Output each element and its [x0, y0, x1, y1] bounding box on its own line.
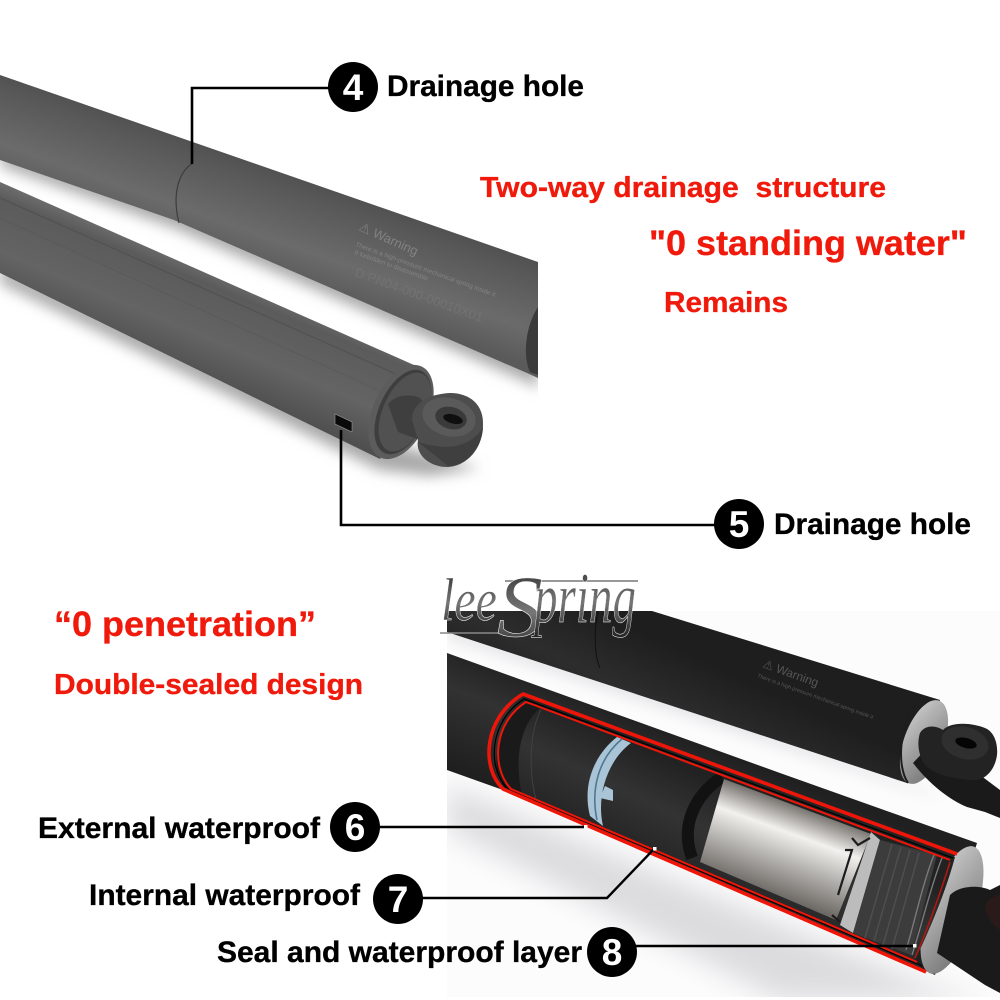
product photo: black cutaway actuator: [447, 611, 1000, 1000]
callout 8: seal and waterproof layer: Seal and waterproof layer: [217, 936, 582, 969]
upper rod shadow: [0, 150, 538, 388]
rod shadows: [447, 634, 952, 997]
watermark logo: leeSpring: pring: [531, 558, 636, 638]
product photo: grey actuator rods: [0, 75, 538, 476]
rear rod warning label: There is a high pressure mechanical spring inside it: [756, 673, 874, 721]
red seal outline: [489, 694, 957, 972]
callout 8: seal and waterproof layer: 8: [602, 932, 622, 973]
callout 4: drainage hole: 4: [343, 67, 364, 108]
upper grey rod: [0, 75, 538, 378]
callout 7: internal waterproof: Internal waterproof: [89, 879, 361, 912]
heading: two-way drainage: "0 standing water": [649, 224, 967, 263]
lower rod shadow: [0, 265, 480, 476]
callout 6: external waterproof: [38, 802, 588, 852]
callout 7: internal waterproof: [89, 847, 656, 924]
watermark logo: leeSpring: lee: [441, 567, 497, 633]
front rod connector: [937, 885, 1000, 993]
silver motor body: [700, 779, 871, 920]
heading: two-way drainage: Two-way drainage structure: [480, 172, 886, 204]
front black rod: [447, 653, 997, 981]
photo backdrop: [447, 611, 1000, 999]
warning label on upper rod: [353, 219, 496, 325]
callout 8: seal and waterproof layer: [217, 927, 916, 977]
callout 7: internal waterproof: 7: [388, 879, 408, 920]
warning label on upper rod: ⚠ Warning: [357, 219, 421, 258]
callout 5: drainage hole: [341, 430, 971, 549]
watermark logo: leeSpring: S: [497, 559, 543, 656]
callout 5: drainage hole: Drainage hole: [774, 508, 971, 541]
callout 6: external waterproof: External waterproof: [38, 812, 321, 845]
cutaway interior: [489, 694, 957, 972]
callout 4: drainage hole: Drainage hole: [387, 70, 584, 103]
lower grey rod: [0, 182, 447, 469]
threaded seal section: [853, 840, 937, 955]
heading: double-sealed: “0 penetration”: [54, 605, 316, 644]
callout 6: external waterproof: 6: [345, 807, 365, 848]
rear black rod: [447, 611, 958, 790]
warning label on upper rod: There is a high-pressure mechanical spring inside it: [354, 241, 496, 299]
heading: double-sealed: Double-sealed design: [54, 669, 363, 701]
black collar: [688, 777, 722, 858]
warning label on upper rod: D PN04-000-00010X01: [353, 265, 485, 325]
heading: double-sealed: [54, 605, 363, 701]
heading: two-way drainage: Remains: [664, 287, 788, 319]
rear rod connector: [913, 721, 1000, 818]
silver end tabs: [832, 832, 880, 933]
blue ring: [588, 737, 631, 826]
warning label on upper rod: It forbidden to disassemble: [353, 249, 429, 283]
callout 5: drainage hole: 5: [729, 504, 749, 545]
watermark logo: leeSpring: [440, 558, 638, 656]
callout 4: drainage hole: [192, 62, 584, 164]
heading: two-way drainage: [480, 172, 967, 319]
rear rod warning label: ⚠ Warning: [761, 657, 821, 690]
drainage hole opening: [335, 414, 352, 432]
rod eye connector: [388, 392, 483, 467]
rod end cap: [370, 364, 434, 460]
